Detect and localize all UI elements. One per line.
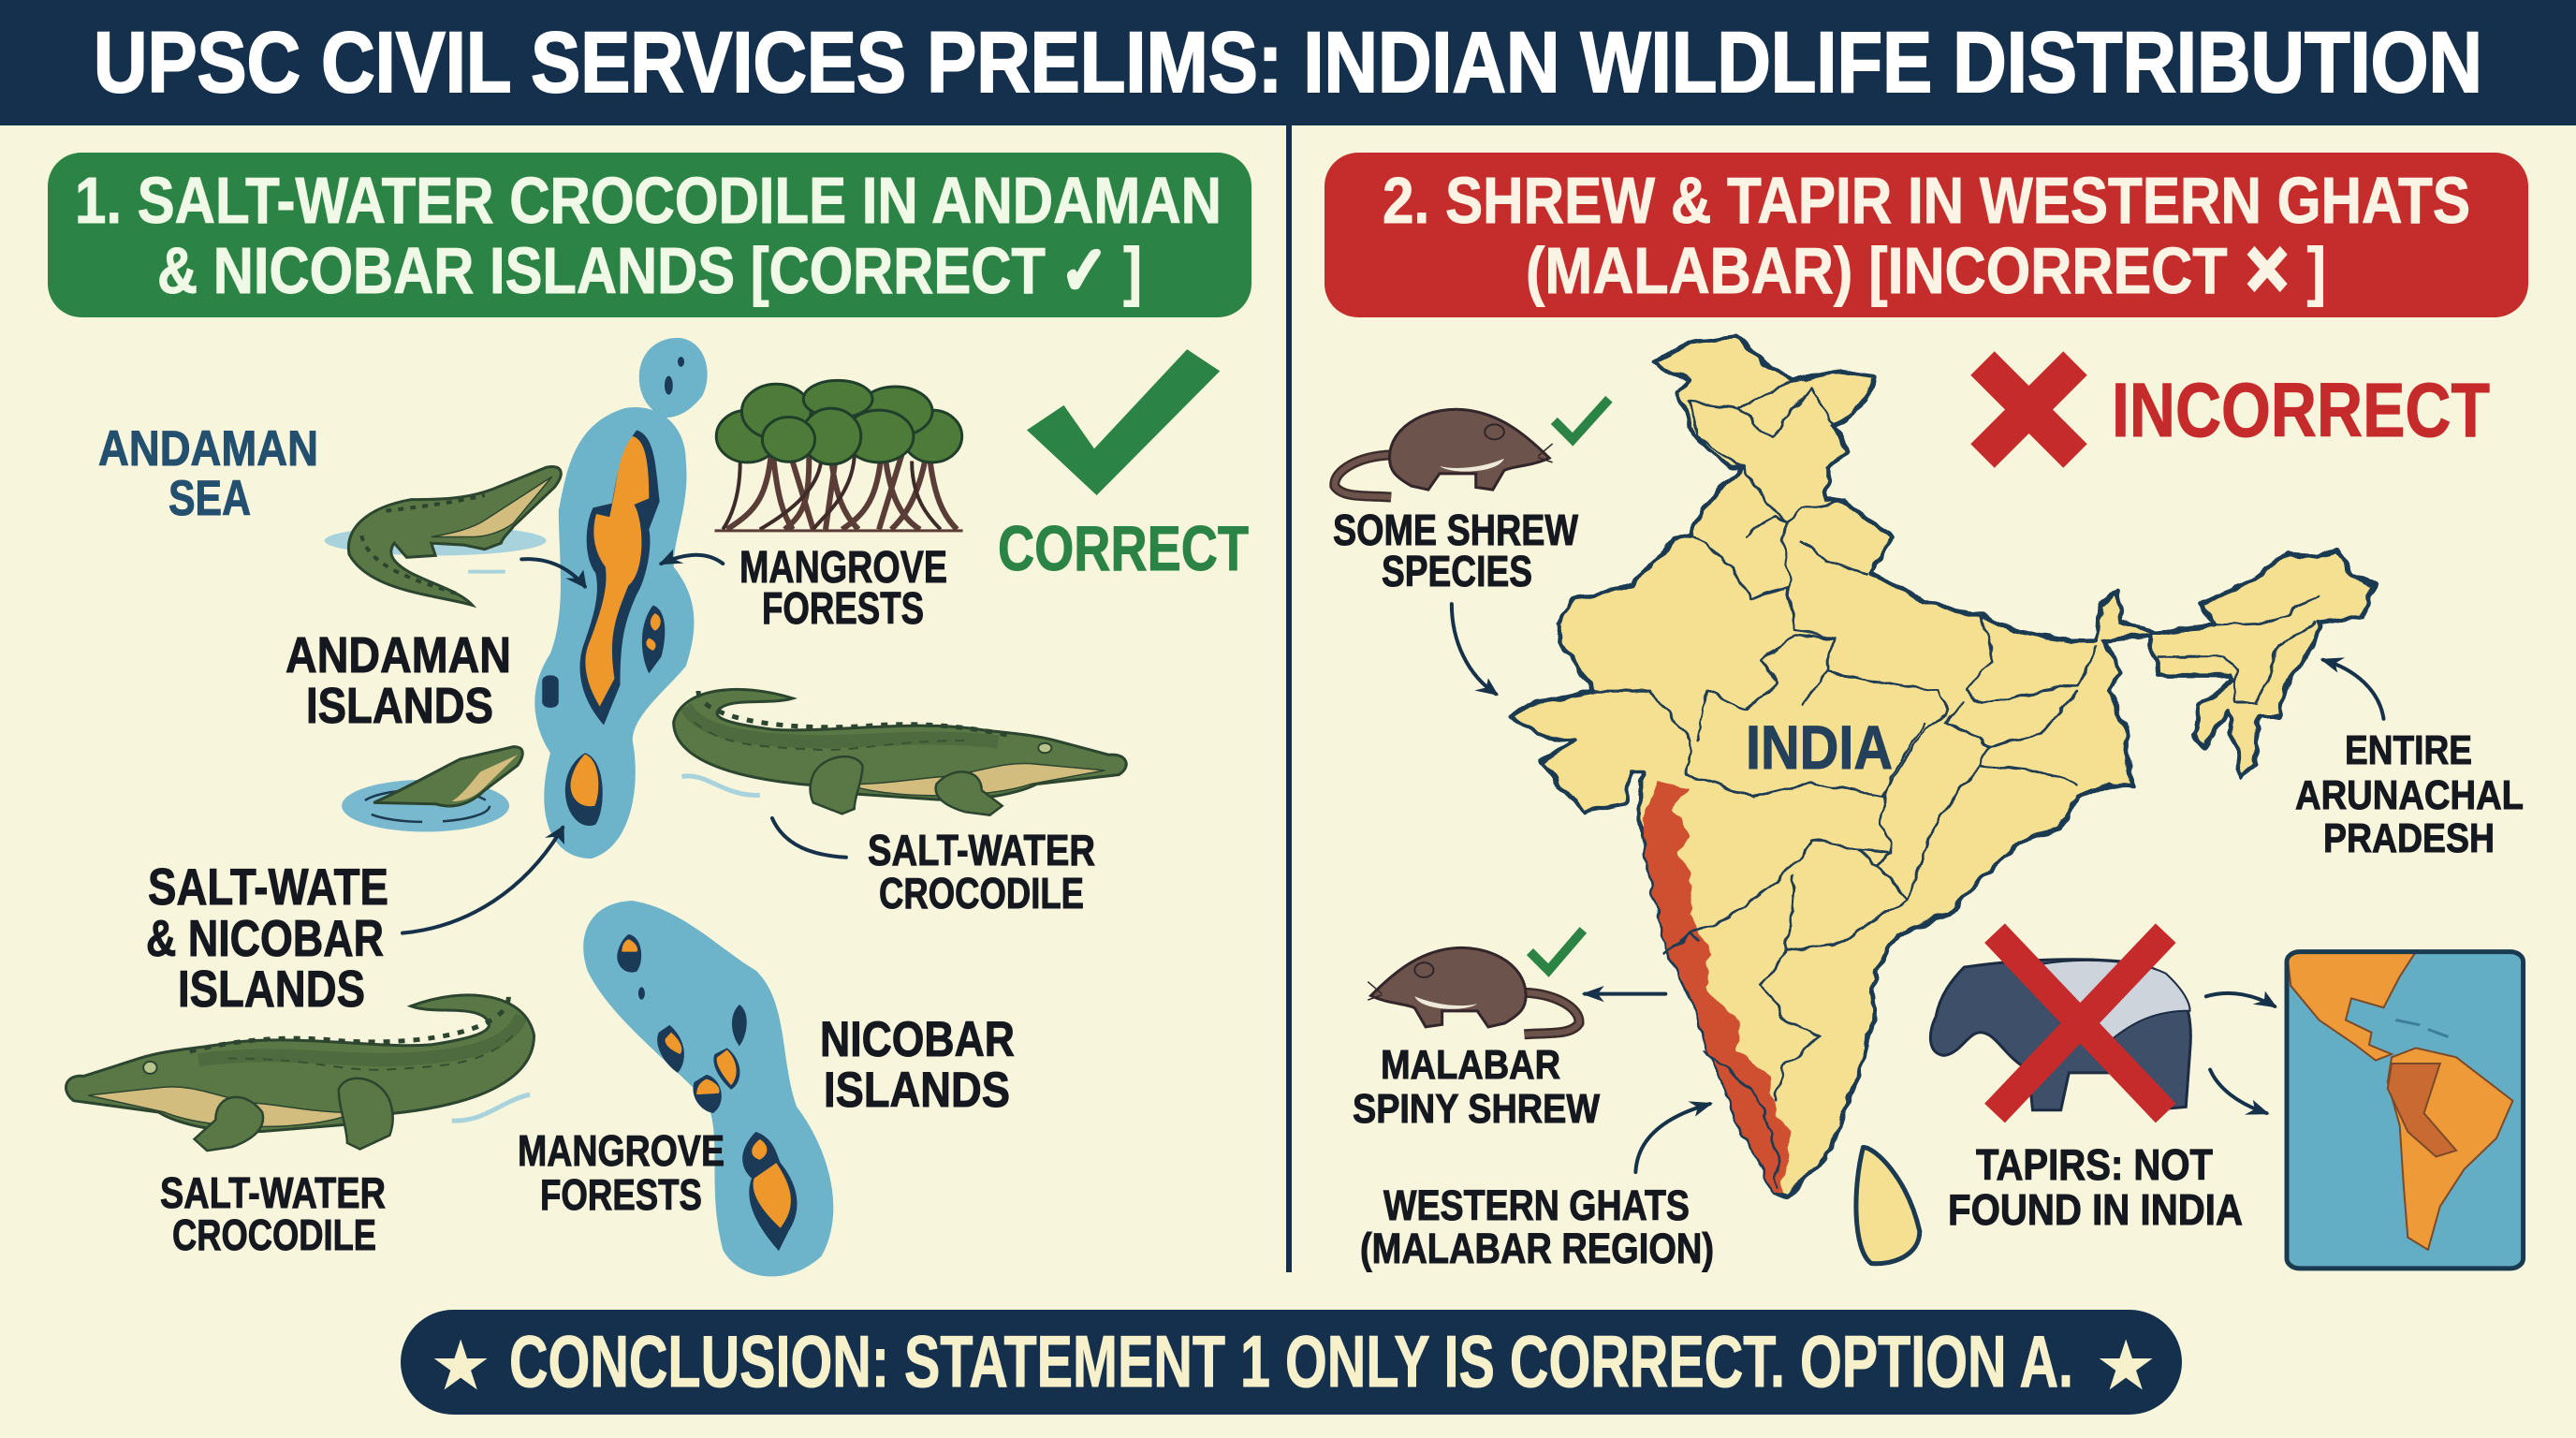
label: salt-water and Nicobar islands: SALT-WATE — [148, 858, 388, 916]
icon: mangrove forest — [715, 380, 963, 531]
label: India: INDIA — [1746, 712, 1893, 782]
label: mangrove forests upper — [739, 543, 947, 634]
label: salt-water crocodile right: SALT-WATER — [868, 826, 1095, 874]
arrow: tapir to Americas lower — [2210, 1070, 2266, 1113]
label: Andaman Islands: ISLANDS — [306, 678, 493, 734]
label: Andaman Sea: ANDAMAN — [98, 421, 318, 477]
label: mangrove forests lower: MANGROVE — [518, 1126, 724, 1175]
label: mangrove forests lower: FORESTS — [540, 1170, 702, 1219]
label: salt-water crocodile right: CROCODILE — [879, 869, 1084, 917]
arrow: mangrove to island — [661, 555, 723, 564]
map: Nicobar sea and islands — [583, 901, 833, 1276]
text labels: right panel — [1333, 368, 2524, 1272]
label: some shrew species: SOME SHREW — [1333, 506, 1578, 554]
label: Malabar spiny shrew: MALABAR — [1381, 1042, 1560, 1088]
map: Andaman sea and islands — [534, 338, 708, 858]
icon: check on spiny shrew — [1530, 930, 1583, 970]
leader: crocodile label — [772, 818, 846, 858]
label: Western Ghats — [1360, 1181, 1714, 1272]
label: entire Arunachal Pradesh: PRADESH — [2323, 815, 2495, 861]
banner line 2: (MALABAR) [INCORRECT ✕ ] — [1526, 232, 2326, 309]
arrow: Western Ghats to spiny shrew — [1585, 992, 1665, 996]
banner line 2: & NICOBAR ISLANDS [CORRECT ✓ ] — [157, 232, 1142, 309]
label: Nicobar Islands — [820, 1012, 1015, 1118]
icon: crocodile lower left — [66, 995, 534, 1151]
central divider — [1286, 125, 1292, 1272]
highlight: Western Ghats — [1641, 781, 1791, 1194]
label: mangrove forests lower — [518, 1126, 724, 1219]
map: India — [1513, 337, 2374, 1197]
arrow: tapir to Americas upper — [2206, 993, 2275, 1006]
label: Andaman Sea — [98, 421, 318, 526]
label: mangrove forests upper: MANGROVE — [739, 543, 947, 593]
label: Andaman Islands — [285, 627, 511, 734]
icon: malabar spiny shrew — [1368, 930, 1583, 1034]
banner: statement 1 correct — [48, 153, 1251, 317]
label: mangrove forests upper: FORESTS — [762, 584, 924, 634]
banner: statement 2 incorrect — [1325, 153, 2528, 317]
label: salt-water crocodile left: SALT-WATER — [160, 1168, 386, 1217]
label: some shrew species: SPECIES — [1382, 547, 1532, 595]
icon: star left: ★ — [430, 1326, 491, 1406]
label: salt-water crocodile left — [160, 1168, 386, 1259]
label: Western Ghats: WESTERN GHATS — [1383, 1181, 1690, 1229]
label: salt-water crocodile right — [868, 826, 1095, 917]
arrow: crocodile to island — [521, 559, 585, 587]
label: correct: CORRECT — [998, 513, 1249, 584]
map: Sri Lanka — [1856, 1148, 1920, 1264]
arrow: Arunachal label — [2323, 660, 2383, 719]
icon: large red cross — [1983, 363, 2075, 456]
arrow: shrew to map — [1452, 604, 1496, 694]
label: incorrect: INCORRECT — [2112, 368, 2490, 453]
map: Latin America — [2287, 952, 2524, 1269]
label: Andaman Islands: ANDAMAN — [285, 627, 511, 683]
icon: check on shrew — [1554, 399, 1609, 439]
conclusion text: CONCLUSION: STATEMENT 1 ONLY IS CORRECT. OPTION A. — [509, 1320, 2073, 1402]
label: Nicobar Islands: NICOBAR — [820, 1012, 1015, 1067]
icon: large green check — [1027, 349, 1220, 495]
label: salt-water and Nicobar islands — [146, 858, 388, 1018]
label: tapirs not found in India: FOUND IN INDIA — [1948, 1185, 2243, 1234]
label: Andaman Sea: SEA — [168, 471, 251, 526]
label: entire Arunachal Pradesh: ARUNACHAL — [2295, 772, 2524, 818]
water ripples — [452, 776, 760, 1121]
label: tapirs not found in India: TAPIRS: NOT — [1976, 1140, 2213, 1189]
label: some shrew species — [1333, 506, 1578, 595]
label: Western Ghats: (MALABAR REGION) — [1360, 1225, 1714, 1272]
label: salt-water crocodile left: CROCODILE — [172, 1211, 376, 1259]
icon: crocodile in water — [342, 747, 522, 832]
icon: tapir crossed out — [1930, 933, 2190, 1113]
banner line 1: 1. SALT-WATER CROCODILE IN ANDAMAN — [75, 164, 1222, 237]
conclusion pill — [401, 1310, 2182, 1415]
text labels: left panel — [98, 421, 1249, 1259]
label: tapirs not found in India — [1948, 1140, 2243, 1234]
header bar — [0, 0, 2576, 125]
arrow: label to Western Ghats — [1635, 1104, 1710, 1172]
icon: crocodile on shore — [325, 467, 561, 605]
icon: red cross over tapir — [1995, 933, 2166, 1113]
icon: crocodile right — [674, 689, 1126, 815]
panel: Andaman and Nicobar illustration — [66, 338, 1220, 1276]
arrow: label to islands — [402, 828, 563, 933]
label: entire Arunachal Pradesh — [2295, 727, 2524, 861]
label: salt-water and Nicobar islands: ISLANDS — [178, 960, 365, 1018]
label: entire Arunachal Pradesh: ENTIRE — [2345, 727, 2472, 773]
label: salt-water and Nicobar islands: & NICOBAR — [146, 909, 384, 967]
icon: star right: ★ — [2095, 1326, 2157, 1406]
icon: shrew upper — [1335, 399, 1609, 497]
label: Malabar spiny shrew: SPINY SHREW — [1353, 1086, 1600, 1132]
label: Malabar spiny shrew — [1353, 1042, 1600, 1132]
label: Nicobar Islands: ISLANDS — [824, 1063, 1010, 1118]
panel: India map illustration — [1335, 337, 2524, 1269]
